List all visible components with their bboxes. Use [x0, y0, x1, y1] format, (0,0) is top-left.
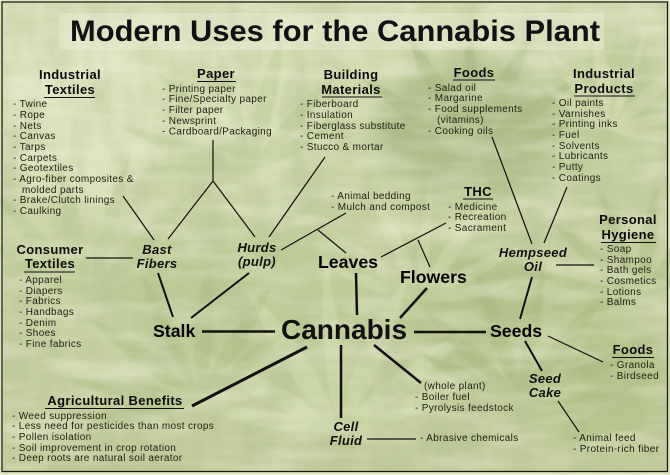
Foods (seeds): - Birdseed [610, 371, 659, 382]
Consumer Textiles: - Fabrics [19, 296, 61, 307]
seed cake list: - Protein-rich fiber [573, 444, 660, 455]
Building Materials: Building [324, 67, 378, 82]
animal bedding list [331, 191, 430, 213]
node: Seed Cake [529, 371, 562, 400]
animal bedding list: - Animal bedding [331, 191, 411, 202]
Personal Hygiene: Hygiene [601, 227, 655, 242]
Building Materials: - Fiberglass substitute [300, 121, 406, 132]
Industrial Products: - Printing inks [552, 119, 618, 130]
Consumer Textiles: - Handbags [19, 307, 74, 318]
Industrial Products: - Oil paints [552, 98, 604, 109]
Industrial Products: Industrial [573, 66, 635, 81]
Foods (seeds): - Granola [610, 360, 655, 371]
Foods (oil): - Food supplements [428, 104, 522, 115]
node: Cell Fluid: Fluid [330, 433, 363, 448]
node: Bast Fibers: Bast [142, 242, 172, 257]
node: Stalk: Stalk [153, 321, 195, 341]
Industrial Products: - Lubricants [552, 151, 608, 162]
title: Modern Uses for the Cannabis Plant [70, 15, 600, 48]
Industrial Textiles: - Geotextiles [13, 163, 74, 174]
whole plant list: - Boiler fuel [415, 392, 470, 403]
Consumer Textiles: - Diapers [19, 286, 63, 297]
seed cake list: - Animal feed [573, 433, 636, 444]
abrasive chemicals: - Abrasive chemicals [420, 433, 518, 444]
THC: THC [464, 184, 492, 199]
Paper: - Printing paper [162, 84, 236, 95]
Consumer Textiles [16, 242, 84, 350]
node: Hurds (pulp) [237, 240, 277, 269]
Industrial Textiles: molded parts [22, 185, 84, 196]
Industrial Products: - Coatings [552, 173, 601, 184]
Industrial Textiles: - Caulking [13, 206, 61, 217]
Industrial Products: - Fuel [552, 130, 580, 141]
Industrial Textiles: - Agro-fiber composites & [13, 174, 134, 185]
Agricultural Benefits: - Weed suppression [12, 411, 107, 422]
Foods (seeds): Foods [613, 342, 653, 357]
node: Leaves: Leaves [318, 252, 378, 272]
Industrial Textiles: Industrial [39, 67, 101, 82]
Consumer Textiles: - Denim [19, 318, 56, 329]
Personal Hygiene [599, 212, 657, 308]
Industrial Textiles: - Brake/Clutch linings [13, 195, 115, 206]
Industrial Textiles [13, 67, 134, 217]
whole plant list: - Pyrolysis feedstock [415, 403, 514, 414]
Consumer Textiles: Consumer [16, 242, 84, 257]
whole plant list: (whole plant) [424, 381, 486, 392]
THC: - Sacrament [448, 223, 506, 234]
Consumer Textiles: - Apparel [19, 275, 62, 286]
Paper [162, 66, 272, 138]
node: Seed Cake: Cake [529, 385, 561, 400]
Building Materials: - Cement [300, 131, 344, 142]
Industrial Textiles: - Nets [13, 121, 42, 132]
Building Materials [300, 67, 406, 153]
Personal Hygiene: - Bath gels [600, 265, 652, 276]
animal bedding list: - Mulch and compost [331, 202, 430, 213]
Paper: - Filter paper [162, 105, 224, 116]
Personal Hygiene: - Cosmetics [600, 276, 657, 287]
Agricultural Benefits: - Deep roots are natural soil aerator [12, 453, 183, 464]
Consumer Textiles: Textiles [25, 256, 75, 271]
whole plant list [415, 381, 514, 414]
node: Cell Fluid: Cell [333, 419, 359, 434]
Personal Hygiene: - Shampoo [600, 255, 652, 266]
Agricultural Benefits: Agricultural Benefits [47, 393, 183, 408]
Industrial Products: - Solvents [552, 141, 600, 152]
node: Seed Cake: Seed [529, 371, 562, 386]
node: Hempseed Oil [499, 245, 568, 274]
Industrial Products [552, 66, 635, 184]
node: Hurds (pulp): (pulp) [238, 254, 276, 269]
Industrial Textiles: - Carpets [13, 153, 57, 164]
node: Hempseed Oil: Oil [524, 259, 542, 274]
Building Materials: - Fiberboard [300, 99, 359, 110]
seed cake list [573, 433, 660, 455]
Agricultural Benefits: - Less need for pesticides than most crops [12, 421, 214, 432]
Foods (seeds) [610, 342, 659, 382]
Personal Hygiene: - Soap [600, 244, 632, 255]
Industrial Textiles: - Tarps [13, 142, 46, 153]
Personal Hygiene: - Lotions [600, 287, 641, 298]
Industrial Textiles: - Rope [13, 110, 45, 121]
Industrial Textiles: - Canvas [13, 131, 56, 142]
connector lines [86, 137, 603, 439]
THC: - Medicine [448, 202, 498, 213]
Consumer Textiles: - Shoes [19, 328, 56, 339]
Building Materials: - Stucco & mortar [300, 142, 384, 153]
Paper: - Newsprint [162, 116, 216, 127]
Industrial Textiles: - Twine [13, 99, 48, 110]
Paper: Paper [197, 66, 235, 81]
Industrial Products: - Putty [552, 162, 583, 173]
node: Cell Fluid [330, 419, 363, 448]
node: Bast Fibers [137, 242, 177, 271]
Agricultural Benefits [12, 393, 214, 464]
Foods (oil): - Salad oil [428, 83, 476, 94]
Foods (oil): - Cooking oils [428, 126, 493, 137]
node: Hempseed Oil: Hempseed [499, 245, 568, 260]
Paper: - Cardboard/Packaging [162, 126, 272, 138]
node: Hurds (pulp): Hurds [237, 240, 277, 255]
Industrial Products: Products [574, 81, 634, 96]
Foods (oil): (vitamins) [437, 115, 484, 126]
node: Flowers: Flowers [400, 267, 467, 287]
title band [59, 13, 604, 50]
Foods (oil): - Margarine [428, 93, 483, 104]
Agricultural Benefits: - Soil improvement in crop rotation [12, 443, 176, 454]
Personal Hygiene: Personal [599, 212, 657, 227]
node: Seeds: Seeds [490, 321, 542, 341]
THC: - Recreation [448, 212, 507, 223]
Building Materials: - Insulation [300, 110, 353, 121]
node: Cannabis: Cannabis [281, 314, 407, 345]
Building Materials: Materials [321, 82, 381, 97]
Consumer Textiles: - Fine fabrics [19, 339, 82, 350]
THC [448, 184, 507, 234]
node: Bast Fibers: Fibers [137, 256, 177, 271]
Foods (oil) [428, 65, 522, 137]
Foods (oil): Foods [454, 65, 494, 80]
Paper: - Fine/Specialty paper [162, 94, 267, 105]
Industrial Textiles: Textiles [45, 82, 95, 97]
Agricultural Benefits: - Pollen isolation [12, 432, 92, 443]
Industrial Products: - Varnishes [552, 109, 606, 120]
Personal Hygiene: - Balms [600, 297, 636, 308]
